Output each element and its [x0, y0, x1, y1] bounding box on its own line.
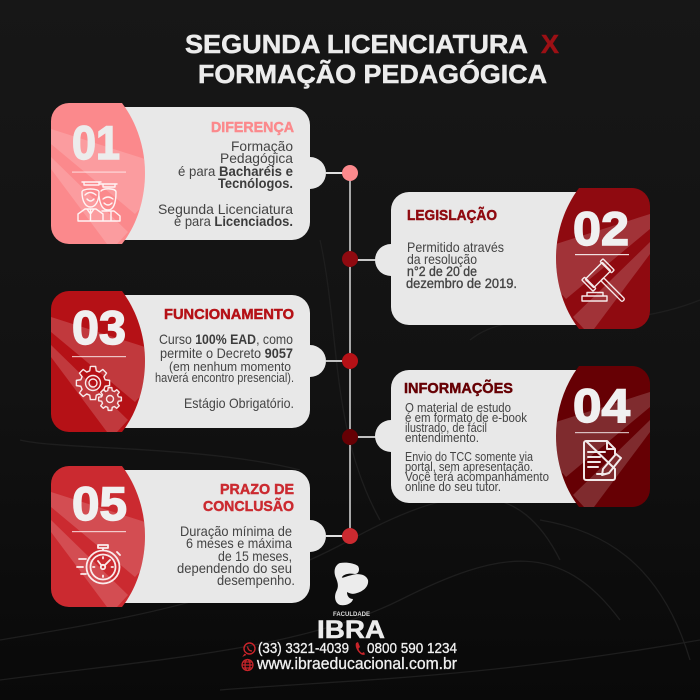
- text: prazo de conclusão: de 15 meses,: [218, 548, 292, 564]
- timeline connector: [326, 172, 376, 537]
- number 04: 04: [573, 379, 630, 432]
- timeline dot 01: [342, 165, 358, 181]
- text: informações: portal, sem apresentação.: [405, 460, 533, 474]
- title: [185, 29, 560, 89]
- text: legislação: da resolução: [407, 251, 477, 267]
- contact info: [242, 641, 457, 673]
- card body 03: [70, 295, 326, 428]
- icon: gavel: [582, 259, 634, 311]
- title: SEGUNDA LICENCIATURA: [185, 29, 528, 59]
- text: faculdade: FACULDADE: [333, 611, 371, 618]
- text: phone 1: (33) 3321-4039: [258, 641, 349, 657]
- number 05: 05: [72, 477, 127, 530]
- text: informações: Envio do TCC somente via: [405, 450, 533, 464]
- text: informações: ilustrado, de fácil: [405, 421, 487, 435]
- number badge 02: [556, 188, 650, 329]
- text: funcionamento: Estágio Obrigatório.: [184, 395, 294, 411]
- number badge 03: [51, 291, 145, 432]
- card body 01: [70, 107, 326, 240]
- text: funcionamento: FUNCIONAMENTO: [164, 306, 294, 323]
- text: diferença: [158, 119, 294, 229]
- panel: 03 funcionamento: [51, 291, 326, 432]
- title: X: [541, 29, 560, 59]
- text: prazo de conclusão: [177, 481, 295, 588]
- text: prazo de conclusão: desempenho.: [217, 572, 295, 588]
- text: prazo de conclusão: Duração mínima de: [180, 523, 292, 539]
- text: legislação: Permitido através: [407, 239, 504, 255]
- icon: whatsapp: [244, 643, 255, 656]
- text: legislação: [406, 206, 517, 291]
- timeline dot 03: [342, 353, 358, 369]
- text: informações: Você terá acompanhamento: [405, 470, 549, 484]
- timeline dot 05: [342, 528, 358, 544]
- icon: gears: [76, 366, 121, 410]
- text: prazo de conclusão: 6 meses e máxima: [186, 535, 292, 551]
- text: informações: O material de estudo: [405, 401, 511, 415]
- text: funcionamento: (em nenhum momento: [169, 360, 291, 374]
- text: website: www.ibraeducacional.com.br: [256, 655, 457, 673]
- text: phone 2: 0800 590 1234: [367, 641, 457, 657]
- text: informações: [404, 379, 549, 494]
- number badge 04: [556, 366, 650, 507]
- number 03: 03: [72, 301, 126, 354]
- icon: stopwatch: [77, 545, 120, 584]
- text: funcionamento: Curso 100% EAD, como: [159, 331, 293, 347]
- card body 05: [70, 470, 326, 603]
- text: legislação: LEGISLAÇÃO: [407, 206, 497, 224]
- text: funcionamento: [155, 306, 294, 411]
- icon: phone: [356, 642, 365, 655]
- text: legislação: n°2 de 20 de: [407, 263, 477, 279]
- text: informações: entendimento.: [405, 431, 479, 445]
- text: IBRA: IBRA: [317, 616, 385, 644]
- text: funcionamento: haverá encontro presencial).: [155, 371, 294, 385]
- text: diferença: DIFERENÇA: [211, 119, 294, 136]
- number badge 01: [51, 103, 145, 244]
- card body 02: [375, 192, 630, 325]
- number 01: 01: [72, 116, 120, 169]
- text: legislação: dezembro de 2019.: [406, 275, 517, 291]
- panel: 01 diferença: [51, 103, 326, 244]
- card body 04: [375, 370, 630, 503]
- text: prazo de conclusão: CONCLUSÃO: [203, 497, 294, 515]
- text: diferença: Pedagógica: [220, 150, 293, 166]
- text: diferença: é para Bacharéis e: [178, 163, 293, 179]
- logo: IBRA: [317, 563, 385, 644]
- text: funcionamento: permite o Decreto 9057: [160, 345, 293, 361]
- number 02: 02: [573, 202, 629, 255]
- number badge 05: [51, 466, 145, 607]
- text: informações: INFORMAÇÕES: [404, 379, 513, 397]
- text: diferença: Tecnólogos.: [218, 175, 293, 191]
- panel: 05 prazo de conclusão: [51, 466, 326, 607]
- text: informações: online do seu tutor.: [405, 480, 501, 494]
- icon: globe: [242, 660, 253, 670]
- icon: graduates: [78, 182, 120, 221]
- panel: 04 informações: [375, 366, 650, 507]
- text: informações: é em formato de e-book: [405, 411, 528, 425]
- panel: 02 legislação: [375, 188, 650, 329]
- text: diferença: Formação: [231, 138, 293, 154]
- title: FORMAÇÃO PEDAGÓGICA: [198, 59, 547, 89]
- timeline dot 04: [342, 429, 358, 445]
- icon: logo mark: [335, 563, 368, 605]
- timeline dot 02: [342, 251, 358, 267]
- text: prazo de conclusão: dependendo do seu: [177, 560, 292, 576]
- icon: document: [584, 441, 621, 480]
- text: prazo de conclusão: PRAZO DE: [220, 481, 294, 498]
- text: diferença: é para Licenciados.: [174, 213, 293, 229]
- text: diferença: Segunda Licenciatura: [158, 201, 293, 217]
